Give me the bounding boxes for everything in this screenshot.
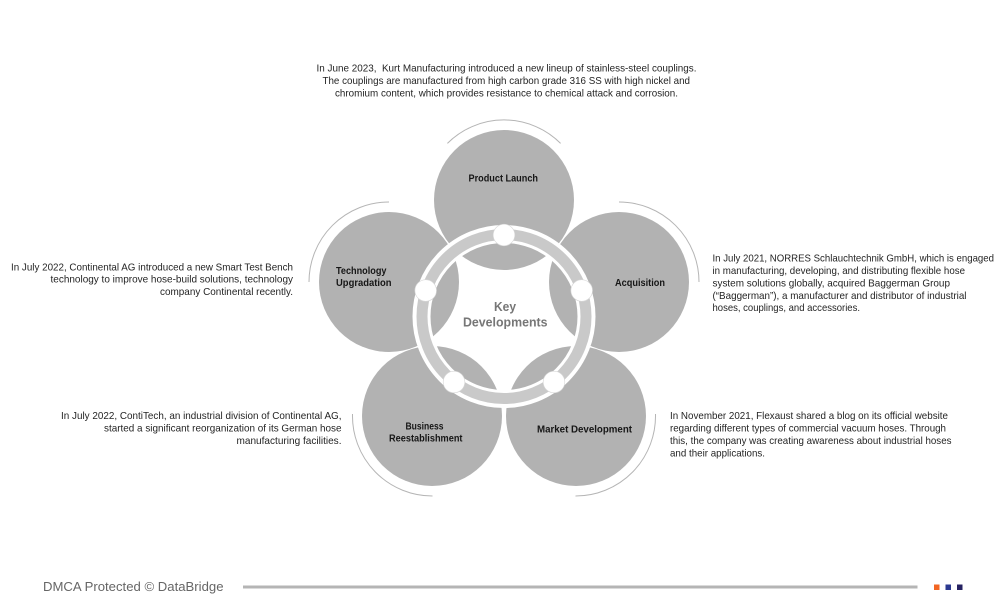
text block: acquisition description: system solutions globally, acquired Baggerman Group — [712, 278, 950, 290]
text block: business reestablishment description — [61, 410, 342, 447]
text block: market development description: this, the company was creating awareness about industrial hoses — [670, 435, 952, 447]
text block: technology upgradation description — [11, 262, 294, 298]
text block: business reestablishment description: manufacturing facilities. — [236, 435, 342, 447]
label: market development: Market Development — [537, 424, 633, 436]
text block: product launch description: The couplings are manufactured from high carbon grade 316 SS with high nickel and — [322, 75, 690, 87]
text block: business reestablishment description: started a significant reorganization of its German hose — [104, 422, 342, 434]
outer arcs around petals — [309, 120, 699, 496]
label: business reestablishment: Business — [406, 422, 444, 432]
label: business reestablishment — [389, 422, 463, 444]
text block: market development description — [670, 410, 952, 460]
center title: Developments — [463, 314, 548, 330]
petal: business reestablishment — [362, 346, 502, 486]
label: acquisition: Acquisition — [615, 278, 665, 289]
center title — [463, 299, 548, 330]
text block: technology upgradation description: company Continental recently. — [160, 286, 293, 298]
text block: acquisition description: (“Baggerman”), a manufacturer and distributor of industrial — [712, 290, 966, 302]
label: technology upgradation: Upgradation — [336, 278, 392, 289]
text block: product launch description: In June 2023, Kurt Manufacturing introduced a new lineup of stainless-steel couplings. — [316, 62, 696, 74]
text block: acquisition description — [712, 252, 994, 314]
petal: technology upgradation — [319, 212, 459, 352]
text block: technology upgradation description: In July 2022, Continental AG introduced a new Smart Test Bench — [11, 262, 293, 274]
footer rule — [243, 586, 918, 588]
text block: product launch description — [316, 62, 696, 100]
text block: market development description: In November 2021, Flexaust shared a blog on its official website — [670, 410, 948, 422]
text block: acquisition description: hoses, couplings, and accessories. — [712, 302, 860, 314]
central ring — [422, 234, 586, 399]
petal: acquisition — [549, 212, 689, 352]
label: business reestablishment: Reestablishment — [389, 434, 463, 444]
text block: acquisition description: in manufacturing, developing, and distributing flexible hose — [712, 265, 965, 277]
footer squares — [934, 584, 962, 590]
diagram: five petal circles — [319, 130, 689, 486]
text block: business reestablishment description: In July 2022, ContiTech, an industrial division of Continental AG, — [61, 410, 342, 422]
center title: Key — [494, 299, 517, 314]
label: technology upgradation — [336, 266, 392, 289]
text block: technology upgradation description: technology to improve hose-build solutions, technology — [50, 274, 294, 286]
ring nodes — [415, 224, 592, 393]
text block: market development description: and their applications. — [670, 448, 765, 460]
footer text: DMCA Protected © DataBridge — [43, 579, 224, 594]
text block: market development description: regarding different types of commercial vacuum hoses. Through — [670, 422, 946, 434]
label: product launch: Product Launch — [468, 174, 538, 184]
petal: product launch — [434, 130, 574, 270]
text block: product launch description: chromium content, which provides resistance to chemical attack and corrosion. — [335, 88, 678, 100]
label: technology upgradation: Technology — [336, 266, 387, 277]
petal: market development — [506, 346, 646, 486]
